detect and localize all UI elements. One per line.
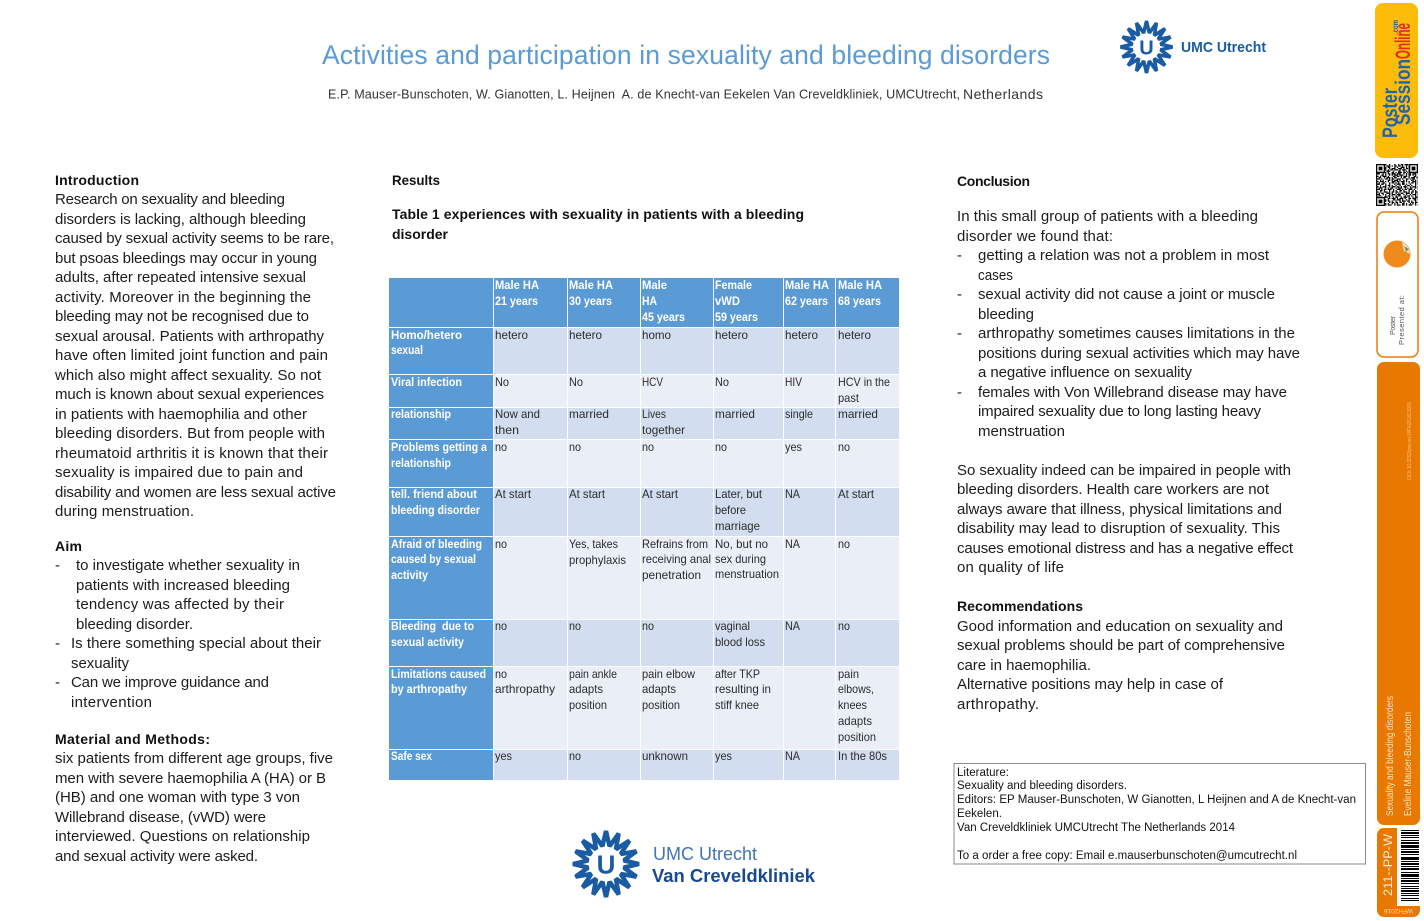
sidebar: presented at box: Presented at:: [1397, 295, 1406, 345]
row: problems getting a relationship: [391, 440, 850, 470]
panel: introduction: [54, 172, 336, 520]
row: relationship: married: [569, 407, 609, 421]
panel: introduction: disorders is lacking, although bleeding: [55, 211, 306, 228]
sidebar: orange details panel: Eveline Mauser-Bunschoten: [1403, 712, 1414, 816]
row: tell friend about bleeding disorder: At start: [495, 487, 532, 501]
logo: UMC Utrecht Van Creveldkliniek: [573, 831, 816, 897]
authors line: E.P. Mauser-Bunschoten, W. Gianotten, L. Heijnen A. de Knecht-van Eekelen Van Creveldkliniek, UMCUtrecht,: [328, 88, 960, 102]
panel: introduction: in patients with haemophilia and other: [55, 406, 307, 423]
panel: conclusion: on quality of life: [957, 559, 1064, 576]
row: homo/hetero sexual: Homo/hetero: [391, 328, 462, 342]
panel: material and methods: (HB) and one woman with type 3 von: [55, 789, 300, 806]
panel: introduction: activity. Moreover in the beginning the: [55, 289, 311, 306]
panel: literature box: Sexuality and bleeding disorders.: [957, 780, 1127, 792]
sidebar: poster id and barcode: [1377, 828, 1420, 917]
panel: conclusion: getting a relation was not a problem in most: [978, 247, 1270, 264]
row: viral infection: Viral infection: [391, 375, 462, 389]
panel: material and methods: [55, 731, 333, 865]
row: limitations caused by arthropathy: adapts: [838, 714, 872, 728]
row: afraid of bleeding: no: [495, 537, 507, 551]
table header row: Male: [642, 278, 667, 292]
row: relationship: Now and: [495, 407, 540, 421]
panel: conclusion: -: [957, 247, 962, 264]
sidebar: presented at box: Poster: [1390, 315, 1397, 335]
row: safe sex: yes: [715, 749, 732, 763]
panel: introduction: disability and women are less sexual active: [55, 484, 336, 501]
table 1: patient experiences: [389, 278, 899, 780]
row: safe sex: NA: [785, 749, 800, 763]
panel: conclusion: disability may lead to disruption of sexuality. This: [957, 520, 1280, 537]
row: safe sex: In the 80s: [838, 749, 887, 763]
panel: aim: patients with increased bleeding: [76, 577, 290, 594]
panel: aim: -: [55, 635, 60, 652]
row: limitations caused by arthropathy: adapts: [642, 682, 676, 696]
row: bleeding due to sexual activity: no: [569, 619, 581, 633]
panel: introduction: bleeding may not be recognised due to: [55, 308, 309, 325]
table header row: HA: [642, 294, 657, 308]
panel: material and methods: six patients from different age groups, five: [55, 750, 333, 767]
panel: introduction: during menstruation.: [55, 503, 194, 520]
row: relationship: together: [642, 423, 685, 437]
heading: results: Results: [392, 172, 440, 188]
sidebar: orange details panel: [1377, 362, 1420, 825]
panel: aim: -: [55, 557, 60, 574]
row: safe sex: [391, 749, 887, 763]
row: viral infection: No: [495, 375, 509, 389]
title: Activities and participation in sexuality and bleeding disorders: [322, 40, 1050, 70]
row: problems getting a relationship: no: [495, 440, 507, 454]
row: problems getting a relationship: no: [715, 440, 727, 454]
panel: conclusion: a negative influence on sexuality: [978, 364, 1192, 381]
row: safe sex: yes: [495, 749, 512, 763]
panel: aim: tendency was affected by their: [76, 596, 284, 613]
row: homo/hetero sexual: hetero: [569, 328, 602, 342]
row: limitations caused by arthropathy: pain ankle: [569, 667, 617, 681]
table header row: 59 years: [715, 310, 758, 324]
panel: conclusion: females with Von Willebrand disease may have: [978, 384, 1287, 401]
row: bleeding due to sexual activity: sexual activity: [391, 635, 464, 649]
row: limitations caused by arthropathy: position: [838, 730, 876, 744]
panel: aim: intervention: [71, 694, 152, 711]
row: viral infection: HCV in the: [838, 375, 890, 389]
row: safe sex: unknown: [642, 749, 688, 763]
panel: introduction: rheumatoid arthritis it is known that their: [55, 445, 328, 462]
panel: material and methods: and sexual activity were asked.: [55, 848, 258, 865]
row: tell friend about bleeding disorder: tell. friend about: [391, 487, 477, 501]
row: limitations caused by arthropathy: elbows,: [838, 682, 874, 696]
row: homo/hetero sexual: sexual: [391, 343, 423, 357]
row: limitations caused by arthropathy: adapts: [569, 682, 603, 696]
panel: introduction: Introduction: [55, 172, 139, 188]
row: tell friend about bleeding disorder: [391, 487, 875, 533]
panel: conclusion: -: [957, 286, 962, 303]
row: afraid of bleeding: sex during: [715, 552, 766, 566]
row: afraid of bleeding: activity: [391, 568, 428, 582]
row: problems getting a relationship: no: [838, 440, 850, 454]
row: relationship: single: [785, 407, 813, 421]
panel: introduction: much is known about sexual experiences: [55, 386, 324, 403]
sidebar: QR code: [1376, 164, 1418, 206]
row: afraid of bleeding: [391, 537, 850, 582]
row: afraid of bleeding: receiving anal: [642, 552, 711, 566]
table header row: Male HA: [569, 278, 613, 292]
row: safe sex: Safe sex: [391, 749, 432, 763]
logo: UMC Utrecht: U: [1139, 38, 1154, 60]
panel: aim: bleeding disorder.: [76, 616, 193, 633]
panel: conclusion: causes emotional distress and has a negative effect: [957, 540, 1294, 557]
sidebar: poster id and barcode: 211--PP-W: [1381, 833, 1395, 896]
heading: table caption: [392, 206, 804, 242]
panel: recommendations: Good information and education on sexuality and: [957, 618, 1283, 635]
row: relationship: Lives: [642, 407, 666, 421]
row: tell friend about bleeding disorder: At start: [569, 487, 606, 501]
row: homo/hetero sexual: hetero: [715, 328, 748, 342]
logo: UMC Utrecht Van Creveldkliniek: UMC Utrecht: [653, 844, 757, 864]
panel: material and methods: interviewed. Questions on relationship: [55, 828, 310, 845]
row: bleeding due to sexual activity: NA: [785, 619, 800, 633]
row: limitations caused by arthropathy: pain elbow: [642, 667, 695, 681]
row: relationship: married: [838, 407, 878, 421]
panel: conclusion: In this small group of patients with a bleeding: [957, 208, 1258, 225]
row: homo/hetero sexual: hetero: [785, 328, 818, 342]
panel: recommendations: sexual problems should be part of comprehensive: [957, 637, 1285, 654]
panel: literature box: Editors: EP Mauser-Bunschoten, W Gianotten, L Heijnen and A de Knecht-van: [957, 794, 1356, 806]
row: afraid of bleeding: prophylaxis: [569, 553, 626, 567]
row: problems getting a relationship: relationship: [391, 456, 451, 470]
panel: introduction: sexual arousal. Patients with arthropathy: [55, 328, 324, 345]
row: limitations caused by arthropathy: position: [642, 698, 680, 712]
panel: material and methods: men with severe haemophilia A (HA) or B: [55, 770, 326, 787]
panel: aim: to investigate whether sexuality in: [76, 557, 300, 574]
table header row: 21 years: [495, 294, 538, 308]
panel: literature box: Eekelen.: [957, 808, 1002, 820]
row: homo/hetero sexual: homo: [642, 328, 671, 342]
panel: recommendations: [957, 598, 1285, 713]
panel: aim: Aim: [55, 538, 82, 554]
table header row: Male HA: [785, 278, 829, 292]
panel: aim: -: [55, 674, 60, 691]
logo: UMC Utrecht: [1120, 21, 1266, 73]
row: afraid of bleeding: Refrains from: [642, 537, 708, 551]
row: viral infection: [391, 375, 890, 405]
row: viral infection: HCV: [642, 375, 663, 389]
panel: introduction: have often limited joint function and pain: [55, 347, 328, 364]
panel: aim: [55, 538, 321, 711]
heading: table caption: disorder: [392, 226, 449, 242]
logo: UMC Utrecht Van Creveldkliniek: U: [597, 850, 615, 880]
panel: material and methods: Willebrand disease, (vWD) were: [55, 809, 266, 826]
row: limitations caused by arthropathy: no: [495, 667, 507, 681]
panel: conclusion: -: [957, 384, 962, 401]
heading: table caption: Table 1 experiences with sexuality in patients with a bleeding: [392, 206, 804, 222]
row: afraid of bleeding: no: [838, 537, 850, 551]
sidebar: poster id and barcode: WFH2016: [1384, 907, 1413, 914]
panel: conclusion: positions during sexual activities which may have: [978, 345, 1300, 362]
row: homo/hetero sexual: hetero: [495, 328, 528, 342]
row: viral infection: HIV: [785, 375, 802, 389]
table header row: 68 years: [838, 294, 881, 308]
panel: conclusion: So sexuality indeed can be impaired in people with: [957, 462, 1291, 479]
row: limitations caused by arthropathy: by arthropathy: [391, 682, 467, 696]
panel: literature box: Literature:: [957, 767, 1009, 779]
row: bleeding due to sexual activity: no: [495, 619, 507, 633]
panel: conclusion: bleeding: [978, 306, 1034, 323]
row: homo/hetero sexual: [391, 328, 871, 357]
panel: conclusion: always aware that illness, physical limitations and: [957, 501, 1282, 518]
row: bleeding due to sexual activity: vaginal: [715, 619, 750, 633]
table header row: Male HA: [838, 278, 882, 292]
row: tell friend about bleeding disorder: Later, but: [715, 487, 763, 501]
sidebar: PosterSessionOnline badge: Poster: [1379, 88, 1402, 138]
panel: literature box: Van Creveldkliniek UMCUtrecht The Netherlands 2014: [957, 822, 1236, 834]
row: tell friend about bleeding disorder: NA: [785, 487, 800, 501]
panel: recommendations: care in haemophilia.: [957, 657, 1091, 674]
sidebar: PosterSessionOnline badge: Session: [1392, 59, 1415, 125]
row: afraid of bleeding: penetration: [642, 568, 701, 582]
row: problems getting a relationship: no: [642, 440, 654, 454]
row: viral infection: No: [569, 375, 583, 389]
row: afraid of bleeding: menstruation: [715, 567, 779, 581]
table header row: 45 years: [642, 310, 685, 324]
row: relationship: then: [495, 423, 519, 437]
logo: UMC Utrecht: UMC Utrecht: [1181, 39, 1266, 56]
row: afraid of bleeding: caused by sexual: [391, 552, 476, 566]
panel: conclusion: menstruation: [978, 423, 1065, 440]
icon: congress emblem: [1384, 240, 1410, 268]
panel: aim: sexuality: [71, 655, 130, 672]
panel: conclusion: bleeding disorders. Health care workers are not: [957, 481, 1270, 498]
panel: conclusion: cases: [978, 267, 1013, 284]
sidebar: orange details panel: DOI: 10.3252/pso.eu.WFH2016.2016: [1407, 402, 1413, 480]
panel: introduction: Research on sexuality and bleeding: [55, 191, 285, 208]
row: viral infection: No: [715, 375, 729, 389]
row: afraid of bleeding: No, but no: [715, 537, 768, 551]
row: afraid of bleeding: NA: [785, 537, 800, 551]
panel: recommendations: Alternative positions may help in case of: [957, 676, 1224, 693]
sidebar: orange details panel: Sexuality and bleeding disorders: [1385, 696, 1396, 816]
table header row: Female: [715, 278, 752, 292]
table header row: Male HA: [495, 278, 539, 292]
row: bleeding due to sexual activity: no: [838, 619, 850, 633]
row: relationship: married: [715, 407, 755, 421]
panel: introduction: but psoas bleedings may occur in young: [55, 250, 317, 267]
panel: introduction: bleeding disorders. But from people with: [55, 425, 325, 442]
panel: aim: Is there something special about their: [71, 635, 321, 652]
row: relationship: relationship: [391, 407, 451, 421]
row: relationship: [391, 407, 878, 437]
panel: introduction: adults, after repeated intensive sexual: [55, 269, 306, 286]
row: bleeding due to sexual activity: Bleeding due to: [391, 619, 474, 633]
panel: conclusion: [957, 173, 1300, 576]
sidebar: PosterSessionOnline badge: .com: [1391, 20, 1400, 34]
table header row: vWD: [715, 294, 740, 308]
row: limitations caused by arthropathy: after TKP: [715, 667, 760, 681]
row: tell friend about bleeding disorder: bleeding disorder: [391, 503, 480, 517]
table header row: [495, 278, 882, 324]
row: problems getting a relationship: yes: [785, 440, 802, 454]
row: tell friend about bleeding disorder: before: [715, 503, 746, 517]
panel: conclusion: sexual activity did not cause a joint or muscle: [978, 286, 1275, 303]
row: limitations caused by arthropathy: [391, 667, 876, 744]
row: safe sex: no: [569, 749, 581, 763]
row: limitations caused by arthropathy: Limitations caused: [391, 667, 486, 681]
row: tell friend about bleeding disorder: At start: [838, 487, 875, 501]
panel: conclusion: impaired sexuality due to long lasting heavy: [978, 403, 1262, 420]
row: limitations caused by arthropathy: stiff knee: [715, 698, 759, 712]
panel: introduction: sexuality is impaired due to pain and: [55, 464, 303, 481]
table backgrounds: [389, 278, 899, 780]
panel: aim: Can we improve guidance and: [71, 674, 269, 691]
panel: material and methods: Material and Methods:: [55, 731, 210, 747]
row: afraid of bleeding: Afraid of bleeding: [391, 537, 482, 551]
panel: conclusion: Conclusion: [957, 173, 1030, 189]
panel: introduction: caused by sexual activity seems to be rare,: [55, 230, 334, 247]
row: bleeding due to sexual activity: no: [642, 619, 654, 633]
panel: literature box: [954, 764, 1366, 864]
panel: introduction: which also might affect sexuality. So not: [54, 367, 322, 384]
row: problems getting a relationship: no: [569, 440, 581, 454]
panel: conclusion: -: [957, 325, 962, 342]
sidebar: PosterSessionOnline badge: [1375, 3, 1418, 158]
table header row: 30 years: [569, 294, 612, 308]
logo: UMC Utrecht Van Creveldkliniek: Van Creveldkliniek: [652, 866, 816, 886]
row: tell friend about bleeding disorder: marriage: [715, 519, 760, 533]
sidebar: presented at box: [1377, 212, 1418, 357]
row: homo/hetero sexual: hetero: [838, 328, 871, 342]
panel: conclusion: disorder we found that:: [957, 228, 1113, 245]
row: bleeding due to sexual activity: blood loss: [715, 635, 765, 649]
row: bleeding due to sexual activity: [391, 619, 850, 649]
row: limitations caused by arthropathy: pain: [838, 667, 859, 681]
row: viral infection: past: [838, 391, 860, 405]
row: limitations caused by arthropathy: arthropathy: [495, 682, 555, 696]
panel: recommendations: Recommendations: [957, 598, 1083, 614]
row: limitations caused by arthropathy: knees: [838, 698, 867, 712]
row: limitations caused by arthropathy: position: [569, 698, 607, 712]
row: afraid of bleeding: Yes, takes: [569, 537, 618, 551]
row: limitations caused by arthropathy: resulting in: [715, 682, 771, 696]
authors line: Netherlands: [963, 86, 1043, 102]
table header row: 62 years: [785, 294, 828, 308]
panel: conclusion: arthropathy sometimes causes limitations in the: [978, 325, 1295, 342]
row: problems getting a relationship: Problems getting a: [391, 440, 487, 454]
row: tell friend about bleeding disorder: At start: [642, 487, 679, 501]
panel: literature box: To a order a free copy: Email e.mauserbunschoten@umcutrecht.nl: [957, 850, 1297, 862]
panel: recommendations: arthropathy.: [957, 696, 1039, 713]
